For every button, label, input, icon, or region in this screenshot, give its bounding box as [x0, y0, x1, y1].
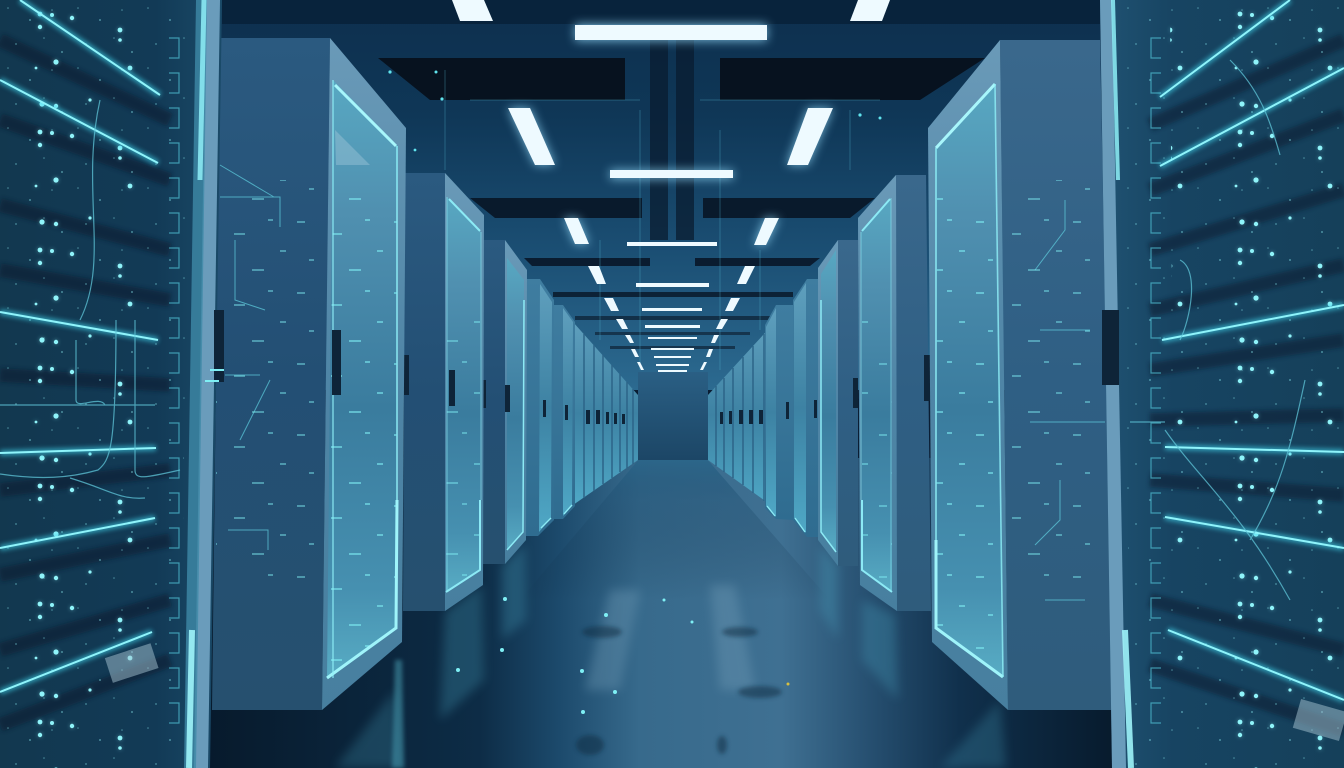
left rack 2 — [403, 173, 484, 611]
glowing cyan lines — [0, 0, 160, 692]
glowing cyan lines — [1160, 0, 1344, 700]
ceiling — [200, 0, 1120, 390]
left rack 3 — [483, 240, 527, 564]
foreground right panel — [1100, 0, 1344, 768]
foreground left panel — [0, 0, 224, 768]
right rack 1 — [928, 40, 1113, 710]
server shelf bands — [1150, 40, 1344, 730]
server shelf bands — [0, 40, 170, 725]
right rack row — [708, 40, 1113, 710]
floor — [205, 458, 1120, 768]
left rack row — [212, 38, 638, 710]
left rack 1 — [212, 38, 406, 710]
far left racks — [526, 279, 638, 536]
right rack 3 — [818, 240, 858, 566]
right rack 2 — [858, 175, 933, 611]
back wall — [638, 372, 708, 460]
ceiling lights — [452, 0, 890, 372]
far right racks — [708, 279, 818, 537]
